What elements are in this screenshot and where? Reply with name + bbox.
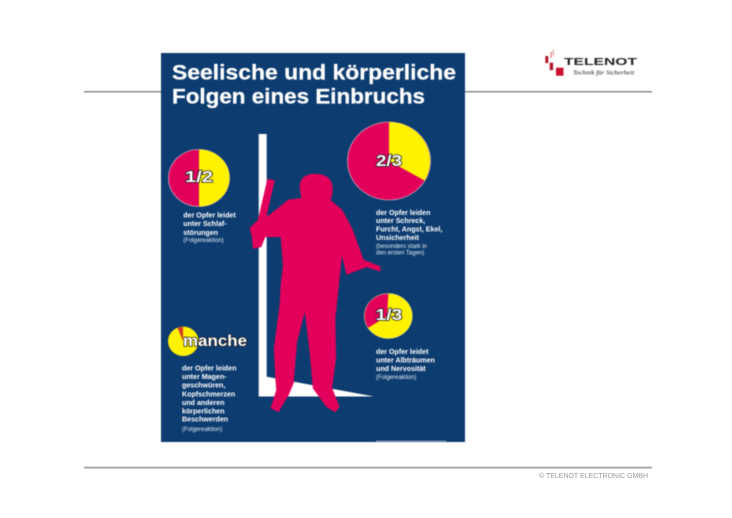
text: manche description: unter Magen- — [182, 373, 227, 381]
pie chart: manche — [168, 327, 247, 356]
logo mark — [545, 50, 564, 76]
text: manche description: der Opfer leiden — [182, 365, 236, 373]
text: manche description: Beschwerden — [182, 416, 228, 424]
footer rule — [84, 467, 652, 469]
footer copyright: © TELENOT ELECTRONIC GMBH — [539, 471, 648, 480]
text: 1/2 description: unter Schlaf- — [183, 220, 227, 228]
poster bottom dashes — [376, 441, 446, 442]
text: manche description: geschwüren, — [182, 382, 225, 390]
text: 2/3 description — [376, 209, 442, 257]
text: 1/3 description: (Folgereaktion) — [376, 375, 416, 381]
text: 1/2 description: (Folgereaktion) — [183, 238, 224, 244]
logo: TELENOT — [545, 50, 638, 77]
title: Folgen eines Einbruchs — [172, 84, 425, 108]
text: 2/3 description: Furcht, Angst, Ekel, — [376, 226, 442, 234]
text: manche description: und anderen — [182, 399, 225, 407]
text: 2/3 description: Unsicherheit — [376, 234, 420, 242]
door and floor light — [259, 134, 374, 396]
figure silhouette — [250, 174, 380, 412]
pie chart: 1/2: 1/2 — [185, 169, 213, 186]
text: 1/3 description: und Nervosität — [376, 365, 426, 373]
text: 1/2 description — [183, 211, 236, 244]
panel: poster — [161, 53, 465, 442]
text: manche description: (Folgereaktion) — [182, 427, 222, 433]
title — [172, 60, 456, 108]
header rule — [84, 91, 652, 93]
text: 2/3 description: unter Schreck, — [376, 217, 425, 225]
text: 1/3 description — [376, 348, 435, 381]
text: 1/3 description: unter Albträumen — [376, 357, 435, 365]
text: 2/3 description: (besonders stark in — [376, 244, 427, 250]
text: 1/2 description: störungen — [183, 229, 218, 237]
text: manche description: körperlichen — [182, 407, 225, 415]
pie chart: 2/3 — [348, 122, 430, 200]
logo wordmark: TELENOT — [564, 57, 638, 68]
text: manche description — [182, 365, 236, 433]
pie chart: manche: manche — [183, 333, 247, 350]
text: 2/3 description: den ersten Tagen) — [376, 251, 424, 257]
title: Seelische und körperliche — [172, 60, 456, 84]
text: 2/3 description: der Opfer leiden — [376, 209, 430, 217]
text: 1/3 description: der Opfer leidet — [376, 348, 429, 356]
logo tagline: Technik für Sicherheit — [573, 70, 634, 77]
pie chart: 2/3: 2/3 — [376, 153, 402, 170]
pie chart: 1/2 — [168, 150, 230, 206]
poster background — [161, 53, 465, 442]
text: 1/2 description: der Opfer leidet — [183, 211, 236, 219]
text: manche description: Kopfschmerzen — [182, 391, 235, 399]
pie chart: 1/3: 1/3 — [376, 307, 402, 324]
pie chart: 1/3 — [364, 294, 412, 338]
